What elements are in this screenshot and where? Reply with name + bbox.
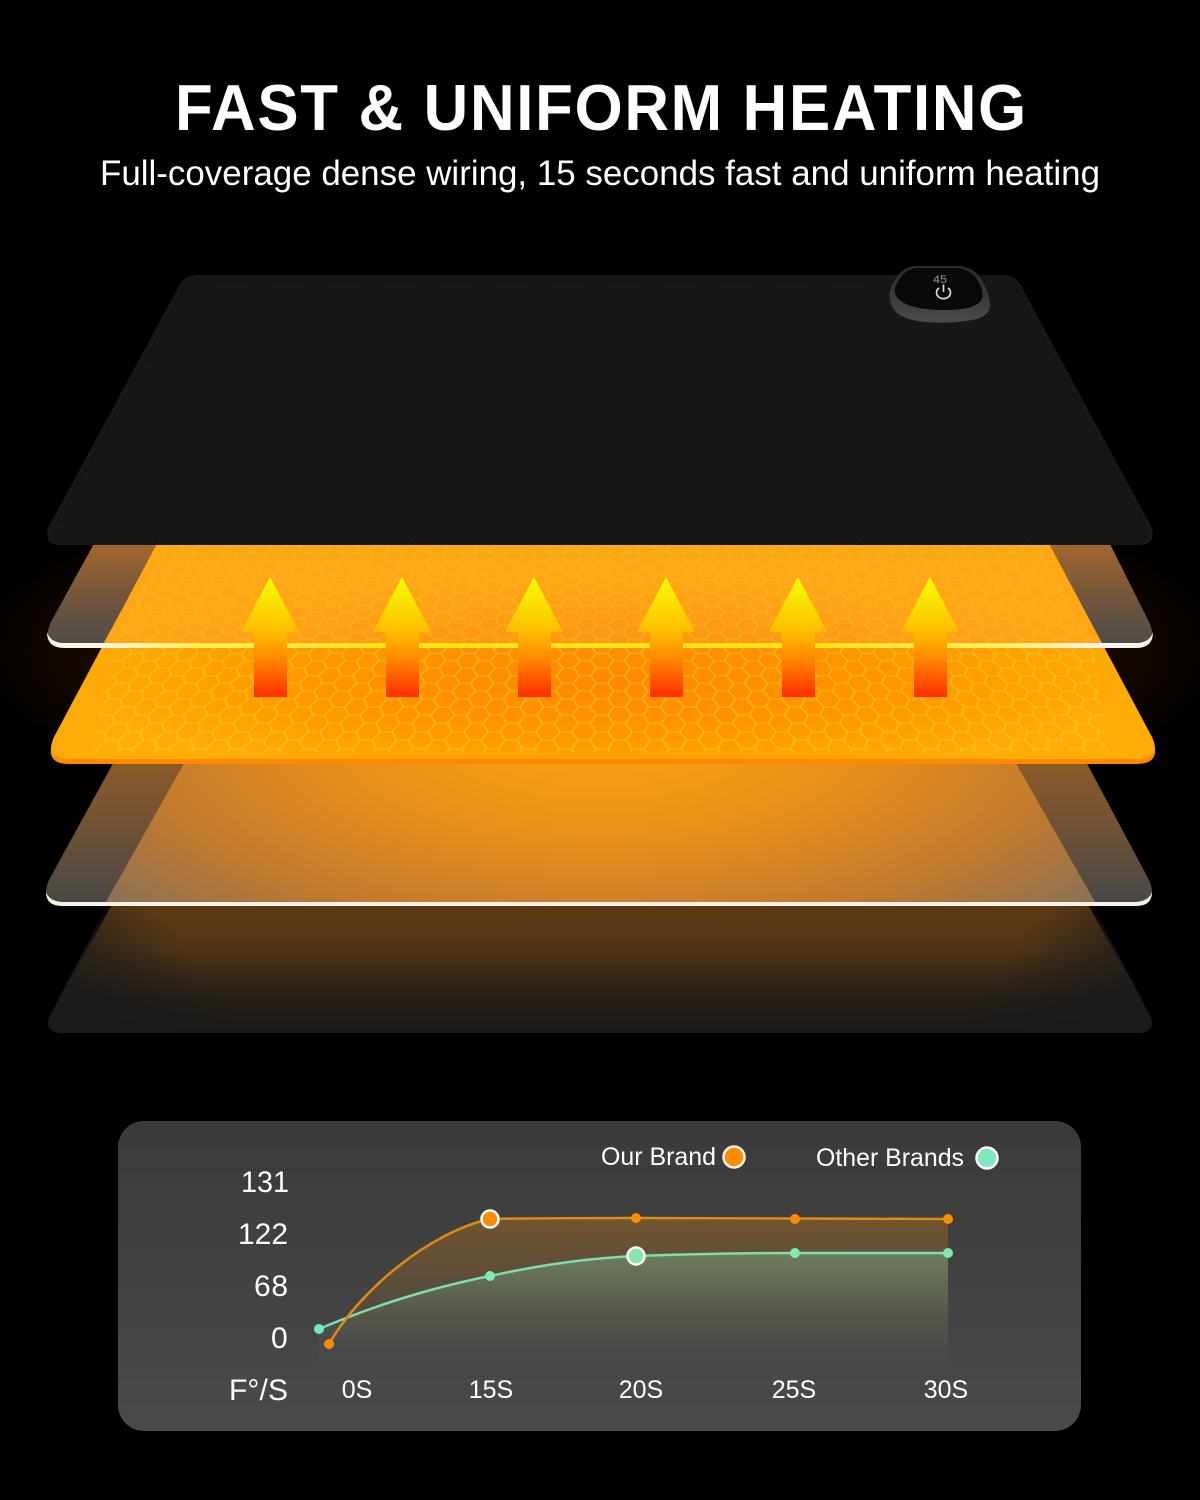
bottom pad [48,765,1152,1033]
top black leather pad [47,275,1153,545]
legend: other brands: Other Brands [816,1144,964,1172]
heat arrows [241,577,959,697]
controller temperature readout: 45 [933,274,947,286]
upper glass sheet over heating plate [47,540,1153,648]
our brand line [324,1210,953,1349]
orange area [329,1218,948,1350]
y axis labels: 68 [254,1270,288,1303]
panel: heating speed chart [118,1121,1081,1431]
y axis labels: 122 [238,1218,288,1251]
x axis labels: 20S [619,1376,663,1404]
honeycomb heating wire pattern [92,545,1108,752]
y axis labels: 131 [241,1166,289,1199]
arrow 5 [769,577,827,697]
x axis labels: 30S [924,1376,968,1404]
arrow 1 [241,577,299,697]
x axis labels: 25S [772,1376,816,1404]
x axis labels: 15S [469,1376,513,1404]
y axis labels: 0 [271,1322,288,1355]
y axis labels: F°/S [229,1374,288,1407]
green area [319,1253,948,1370]
icon: power button [937,284,951,299]
chart background [118,1121,1081,1431]
arrow 6 [901,577,959,697]
arrow 2 [373,577,431,697]
legend: our brand: Our Brand [601,1143,716,1171]
heating plate [51,540,1155,764]
ambient glow [0,470,1200,850]
subtitle: Full-coverage dense wiring, 15 seconds fast and uniform heating [100,154,1100,193]
y axis labels [229,1166,289,1407]
upper glass sheet, back part [48,540,1152,643]
other brands line [314,1248,953,1334]
x axis labels [342,1376,968,1404]
lower glass sheet [46,758,1152,906]
title: FAST & UNIFORM HEATING [175,73,1026,144]
arrow 3 [505,577,563,697]
x axis labels: 0S [342,1376,372,1404]
arrow 4 [637,577,695,697]
temperature controller [889,266,990,323]
